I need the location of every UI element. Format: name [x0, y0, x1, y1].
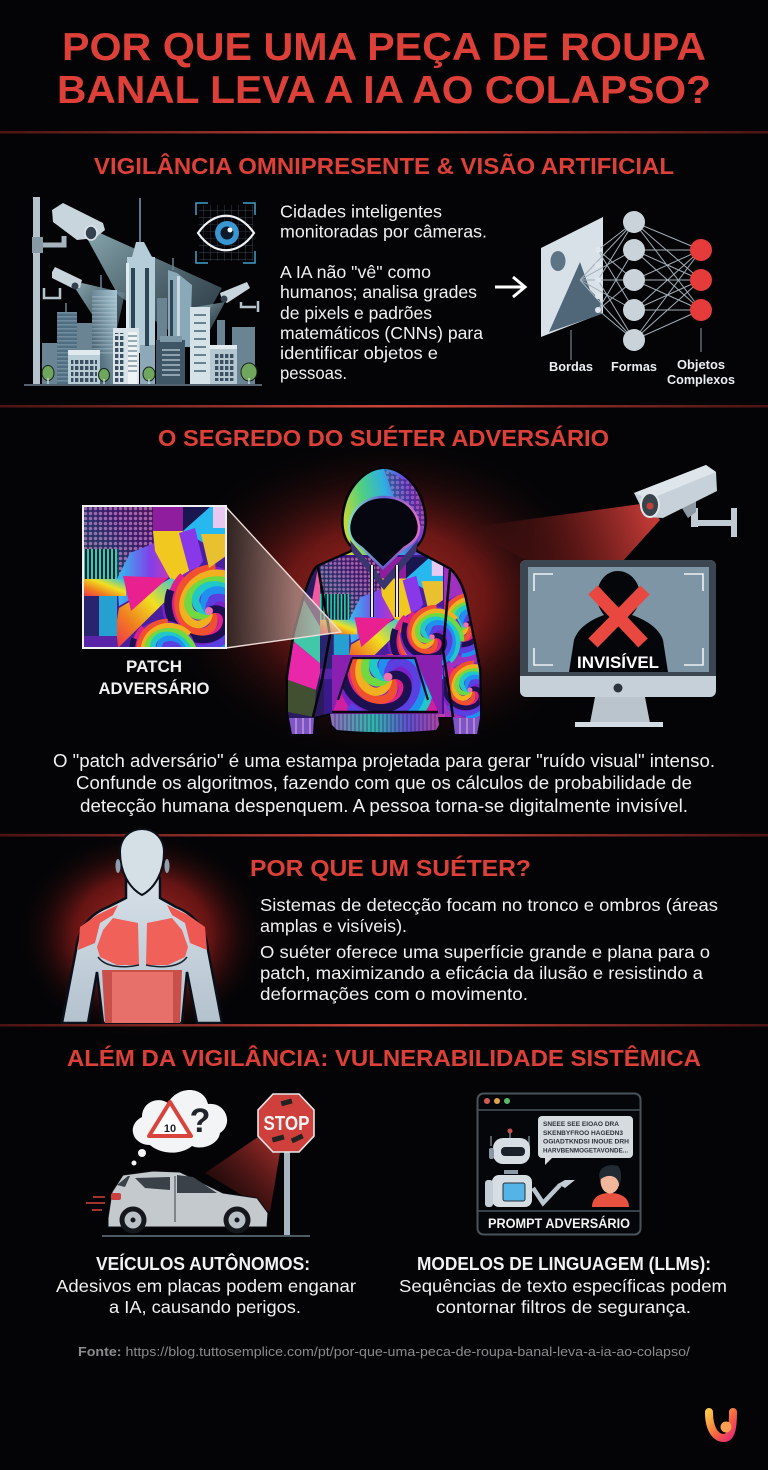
labels: Complexos	[667, 373, 735, 387]
robot	[485, 1128, 575, 1207]
speech bubble	[538, 1116, 633, 1165]
cloud: 10	[164, 1123, 176, 1135]
text block: language models: contornar filtros de segurança.	[436, 1297, 691, 1317]
neural network diagram	[541, 211, 735, 387]
hoodie: pocket swirl	[334, 659, 438, 711]
heading: vigilância: VIGILÂNCIA OMNIPRESENTE & VISÃO ARTIFICIAL	[94, 152, 674, 179]
red X	[593, 590, 645, 643]
glow: torso	[17, 830, 267, 1040]
text block: why a sweater: amplas e visíveis).	[260, 916, 407, 936]
security camera	[634, 465, 737, 537]
patch close-up	[83, 506, 261, 693]
text block: patch description: O "patch adversário" é uma estampa projetada para gerar "ruído visual" intenso.	[53, 751, 715, 771]
hoodie: collar	[350, 540, 418, 590]
connections	[580, 222, 701, 340]
text block: cities and cameras: A IA não "vê" como	[280, 262, 431, 282]
body	[62, 878, 222, 1023]
text block: language models: MODELOS DE LINGUAGEM (LLMs):	[417, 1254, 711, 1274]
text block: cities and cameras: pessoas.	[280, 363, 347, 383]
text block: why a sweater	[260, 895, 718, 1004]
cloud	[132, 1090, 227, 1166]
image panel	[541, 217, 603, 337]
text block: patch description: Confunde os algoritmos, fazendo com que os cálculos de probabilidade de	[76, 773, 692, 793]
heading: por que um suéter: POR QUE UM SUÉTER?	[250, 854, 531, 881]
illustration: autonomous car and stop sign	[86, 1090, 314, 1237]
illustration: smart city with cameras	[24, 197, 262, 386]
icon: eye with grid	[196, 203, 255, 263]
invisible label: INVISÍVEL	[577, 653, 659, 672]
hoodie: waistband and cuffs	[325, 714, 445, 732]
title: BANAL LEVA A IA AO COLAPSO?	[57, 69, 711, 112]
glow: hoodie	[160, 435, 610, 765]
heading: suéter adversário: O SEGREDO DO SUÉTER ADVERSÁRIO	[158, 424, 609, 451]
stop sign	[258, 1094, 314, 1235]
labels: Bordas	[549, 360, 593, 374]
labels	[549, 358, 735, 387]
icon: camera left	[44, 267, 82, 298]
title	[57, 26, 711, 112]
labels: Objetos	[677, 358, 725, 372]
icon: camera right	[220, 282, 258, 312]
cloud: ?	[190, 1102, 210, 1140]
text block: why a sweater: deformações com o movimento.	[260, 984, 528, 1004]
monitor body	[520, 560, 716, 727]
text block: patch description	[53, 751, 715, 816]
text block: why a sweater: O suéter oferece uma superfície grande e plana para o	[260, 942, 710, 962]
text block: cities and cameras: identificar objetos e	[280, 343, 438, 363]
highlighted shoulders	[78, 905, 207, 950]
red camera beam	[465, 503, 660, 562]
connector cone	[226, 507, 341, 648]
person	[592, 1165, 629, 1207]
highlighted chest	[97, 918, 188, 965]
text block: autonomous vehicles: a IA, causando perigos.	[109, 1297, 301, 1317]
window dots	[484, 1098, 510, 1104]
text block: autonomous vehicles: VEÍCULOS AUTÔNOMOS:	[96, 1253, 310, 1274]
icon: light beams	[75, 233, 225, 347]
silhouette	[569, 571, 668, 672]
hoodie: drawstrings	[372, 565, 397, 617]
monitor: invisible person	[520, 560, 716, 727]
stop sign: STOP	[264, 1113, 310, 1135]
text block: cities and cameras: de pixels e padrões	[280, 303, 432, 323]
hoodie: seam lines	[313, 567, 453, 717]
red nodes	[690, 239, 712, 321]
hoodie: hood fill	[344, 469, 424, 555]
text block: why a sweater: Sistemas de detecção focam no tronco e ombros (áreas	[260, 895, 718, 915]
label: patch adversário: ADVERSÁRIO	[98, 679, 210, 698]
text block: autonomous vehicles: Adesivos em placas podem enganar	[56, 1276, 356, 1296]
logo	[709, 1412, 733, 1438]
hoodie	[286, 466, 482, 734]
title: POR QUE UMA PEÇA DE ROUPA	[62, 26, 706, 69]
icon: trees	[42, 363, 257, 382]
arrow	[495, 277, 525, 297]
hoodie: face opening	[349, 497, 419, 568]
text block: cities and cameras: humanos; analisa grades	[280, 282, 477, 302]
text block: why a sweater: patch, maximizando a eficácia da ilusão e resistindo a	[260, 963, 703, 983]
speech bubble: SKENBYFROO HAGEDN3	[543, 1130, 624, 1137]
text block: cities and cameras	[280, 202, 487, 383]
icon: pole	[33, 197, 40, 385]
text block: cities and cameras: monitoradas por câmeras.	[280, 222, 487, 242]
hoodie: sleeves	[288, 564, 332, 734]
hoodie: chest pattern	[320, 557, 443, 680]
label: patch adversário	[98, 658, 210, 698]
text block: language models: Sequências de texto específicas podem	[399, 1276, 727, 1296]
illustration: prompt window	[478, 1094, 640, 1234]
small nodes	[595, 247, 601, 313]
label: patch adversário: PATCH	[126, 658, 182, 676]
labels: Formas	[611, 360, 657, 374]
window caption: PROMPT ADVERSÁRIO	[488, 1216, 630, 1231]
speech bubble: SNEEE SEE EIOAO DRA	[543, 1121, 619, 1128]
source line: Fonte: https://blog.tuttosemplice.com/pt/por-que-uma-peca-de-roupa-banal-leva-a-ia-ao-colapso/	[78, 1344, 690, 1359]
text block: patch description: detecção humana despenquem. A pessoa torna-se digitalmente invisível.	[80, 796, 688, 816]
icon: camera top	[52, 203, 105, 240]
speech bubble: OGIADTKNDSI INOUE DRH	[543, 1138, 629, 1146]
frame corners	[534, 574, 703, 665]
car	[108, 1171, 268, 1234]
text block: autonomous vehicles	[56, 1253, 356, 1317]
torso figure	[62, 829, 222, 1023]
red beam	[205, 1137, 280, 1212]
text block: cities and cameras: matemáticos (CNNs) para	[280, 323, 483, 343]
speech bubble: HARVBENMOGETAVONDE...	[543, 1148, 628, 1154]
icon: skyline	[42, 198, 257, 385]
text block: language models	[399, 1254, 727, 1317]
text block: cities and cameras: Cidades inteligentes	[280, 202, 442, 222]
grey nodes	[623, 211, 645, 351]
highlighted abdomen	[102, 970, 182, 1023]
speed lines	[86, 1197, 105, 1210]
head	[120, 829, 164, 895]
heading: além da vigilância: ALÉM DA VIGILÂNCIA: VULNERABILIDADE SISTÊMICA	[67, 1044, 701, 1071]
